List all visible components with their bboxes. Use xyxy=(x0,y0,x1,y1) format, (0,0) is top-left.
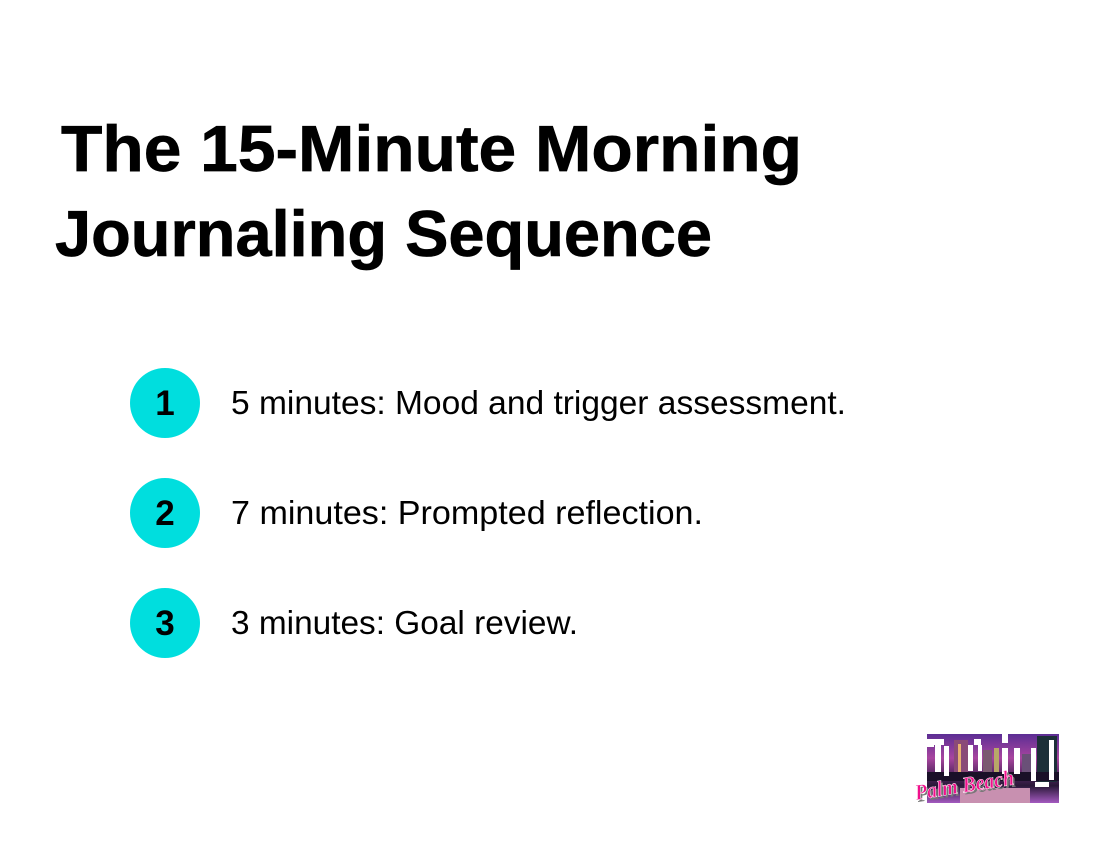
title: The 15-Minute Morning xyxy=(61,112,802,185)
step 2 badge: 2 xyxy=(155,494,175,533)
step 3 text: 3 minutes: Goal review. xyxy=(231,605,578,642)
step 2 text: 7 minutes: Prompted reflection. xyxy=(231,495,703,532)
step 1 text: 5 minutes: Mood and trigger assessment. xyxy=(231,385,846,422)
step 3 badge: 3 xyxy=(155,604,175,643)
step 1 badge: 1 xyxy=(155,384,175,423)
step 3 xyxy=(130,588,578,658)
step 1 badge xyxy=(130,368,200,438)
step 1 xyxy=(130,368,846,438)
step 2 xyxy=(130,478,703,548)
logo: Amity Palm Beach: Palm Beach xyxy=(912,765,1016,805)
logo: Amity Palm Beach: Palm Beach xyxy=(914,767,1018,807)
logo: Amity Palm Beach xyxy=(912,734,1059,807)
step 2 badge xyxy=(130,478,200,548)
title: Journaling Sequence xyxy=(55,197,712,270)
step 3 badge xyxy=(130,588,200,658)
title xyxy=(55,112,802,270)
